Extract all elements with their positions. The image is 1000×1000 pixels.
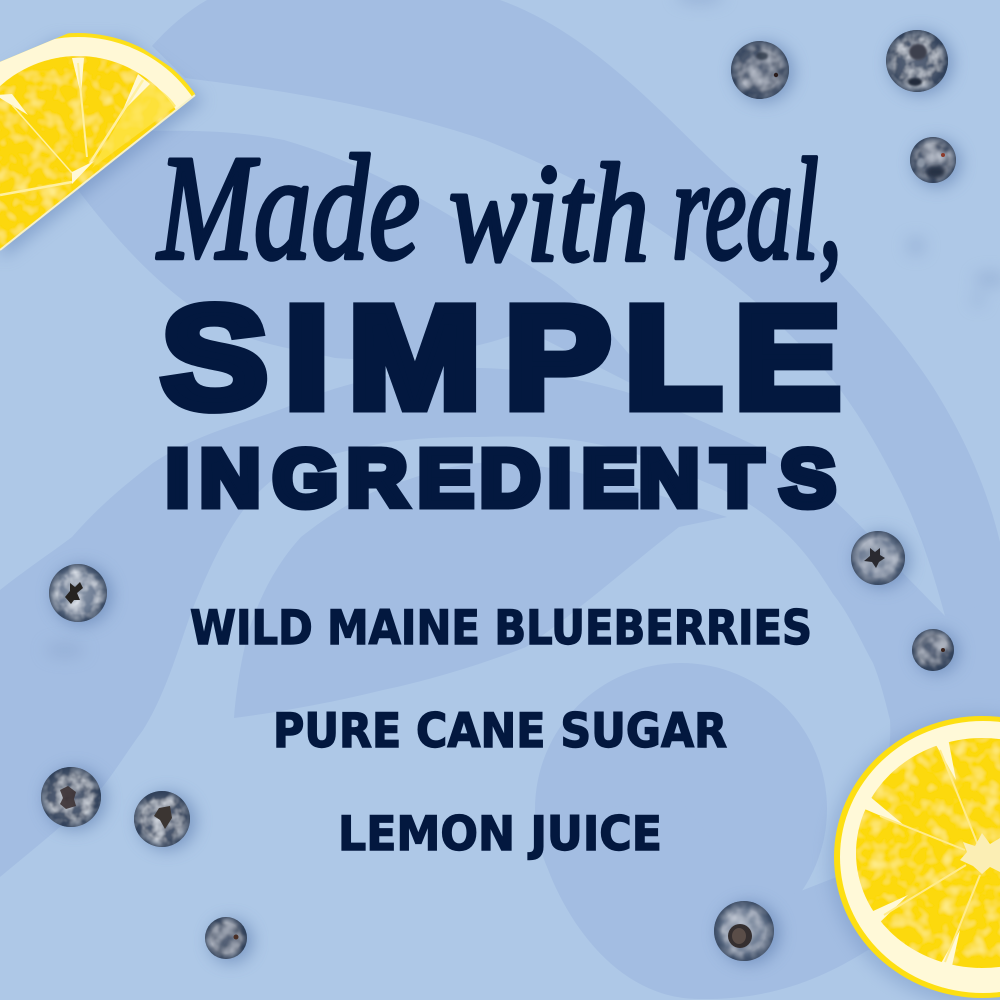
- headline: [156, 125, 842, 523]
- swirl: second band: [78, 131, 670, 408]
- lemon slice bottom-right: [828, 714, 1000, 1000]
- berry left 2: [41, 767, 101, 827]
- handwritten line: Made with real,: real,: [672, 130, 842, 290]
- lemon flesh: [856, 738, 1000, 968]
- ingredient: lemon juice: LEMON JUICE: [338, 807, 662, 862]
- berry left 1: [49, 564, 107, 622]
- berry bottom 2: [714, 901, 774, 961]
- berry top 3: [910, 137, 956, 183]
- berry right 1: [851, 531, 905, 585]
- faint out-of-focus shadows: [45, 0, 1000, 657]
- lemon segment separators: [855, 738, 960, 975]
- swirl: lower blob: [535, 800, 900, 999]
- lemon center pith: [960, 833, 1000, 874]
- wedge flesh: [0, 56, 176, 249]
- handwritten line: Made with real,: [156, 125, 842, 291]
- ingredient: sugar: PURE CANE SUGAR: [273, 704, 727, 759]
- swirl: circle: [535, 663, 827, 955]
- handwritten line: Made with real,: with: [449, 136, 649, 291]
- ingredient list: [190, 601, 812, 862]
- berry top 2: [886, 30, 948, 92]
- handwritten line: Made with real,: Made: [156, 125, 420, 291]
- berry left 3: [134, 791, 190, 847]
- berry right 2: [912, 629, 954, 671]
- swirl: top band: [152, 0, 1000, 700]
- ingredient: blueberries: WILD MAINE BLUEBERRIES: [190, 601, 812, 656]
- lemon wedge top-left: [0, 33, 204, 258]
- SIMPLE: SIMPLE: [162, 278, 840, 438]
- pale notches at segment ends: [72, 58, 84, 89]
- swirl: large arc and right region: [0, 368, 1000, 960]
- swirl: inner leaf: [234, 463, 727, 718]
- berry bottom 1: [205, 917, 247, 959]
- berry top 1: [731, 41, 789, 99]
- INGREDIENTS: INGREDIENTS: [166, 434, 835, 523]
